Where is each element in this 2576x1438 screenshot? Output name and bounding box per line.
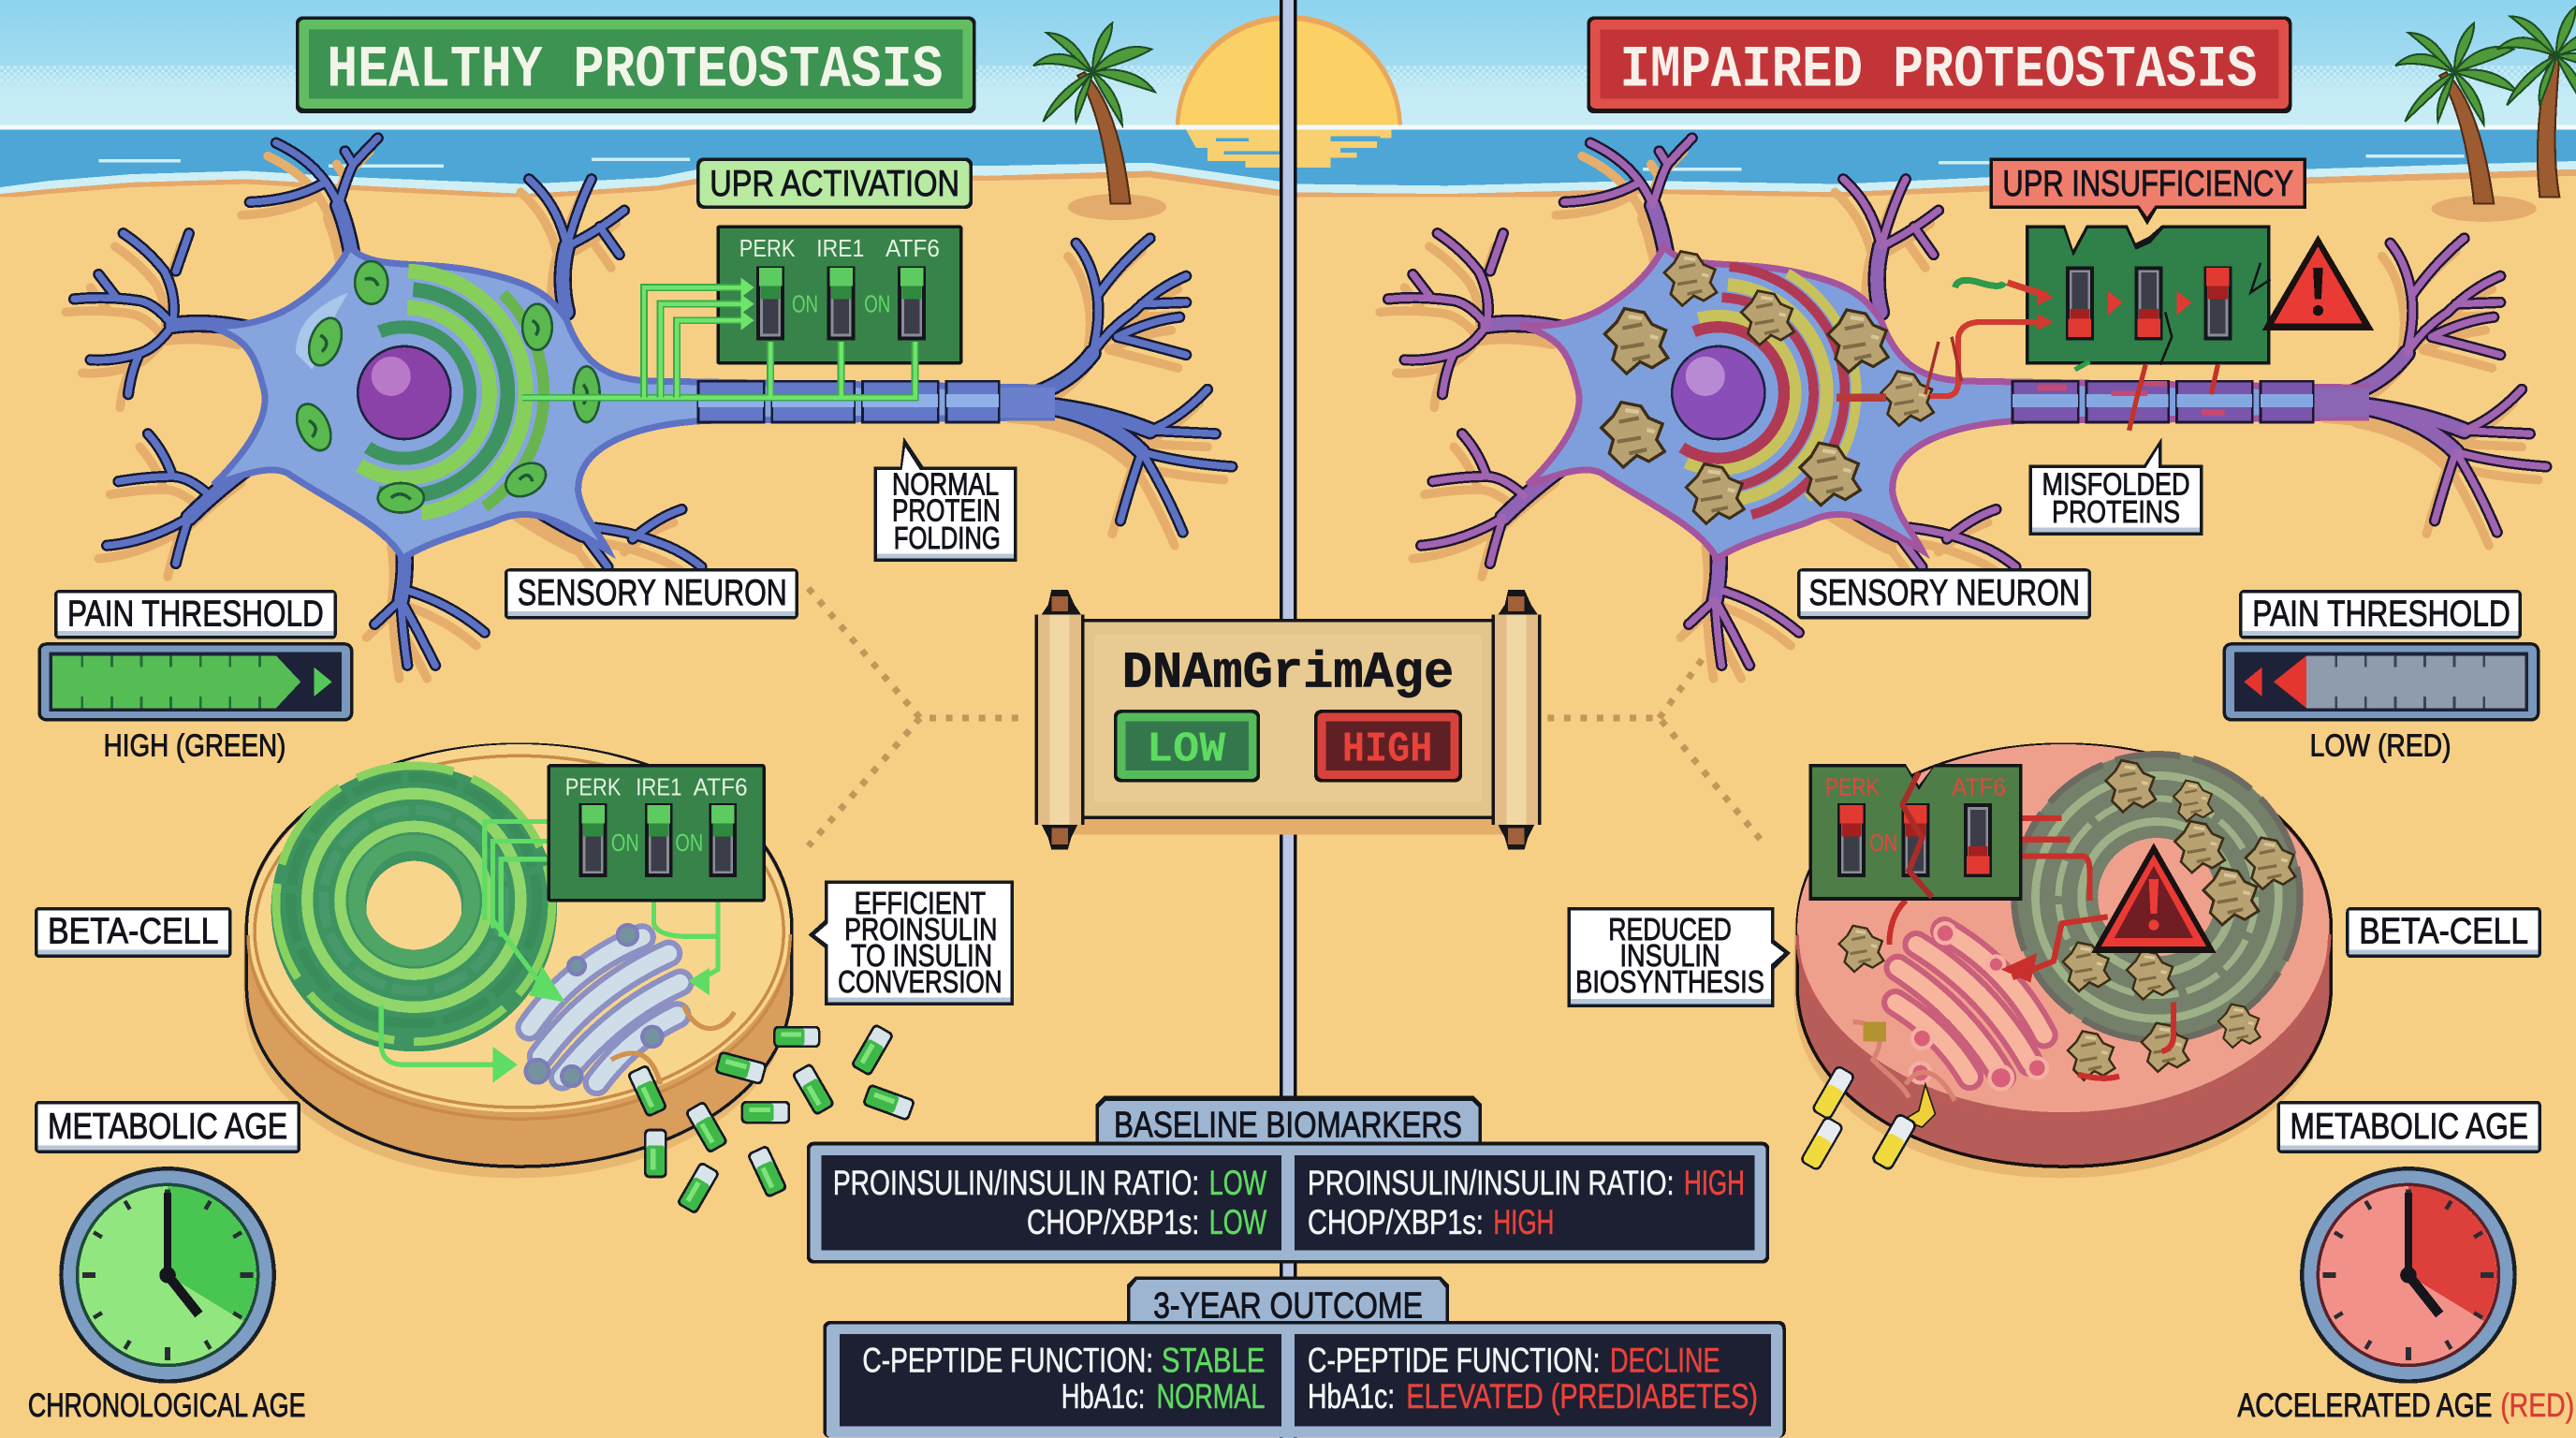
- golgi: impaired: [1877, 917, 2060, 1100]
- UPR switch panel: healthy: PERK: [739, 234, 796, 262]
- UPR switch panel: beta-cell healthy: IRE1: [636, 772, 681, 800]
- UPR switch panel: beta-cell healthy: ATF6: [694, 772, 748, 800]
- clock: chronological age: [59, 1167, 276, 1384]
- callout: efficient conversion: EFFICIENT: [855, 887, 986, 921]
- callout: normal protein folding: PROTEIN: [892, 493, 1001, 528]
- label: metabolic age: [2277, 1101, 2541, 1153]
- label: sensory neuron: [505, 568, 798, 620]
- callout: misfolded proteins: MISFOLDED: [2042, 467, 2190, 502]
- tab: 3-year outcome: [1127, 1277, 1449, 1331]
- label: beta-cell: BETA-CELL: [48, 911, 218, 951]
- misfolded ER arcs: [1530, 204, 1907, 581]
- UPR switch panel: beta-cell healthy: ON: [675, 829, 703, 857]
- callout: misfolded proteins: PROTEINS: [2052, 495, 2180, 530]
- biomarker rows: impaired: CHOP/XBP1s:: [1308, 1203, 1484, 1241]
- insulin granules: impaired: [1799, 1064, 1918, 1172]
- panel: 3-year outcome: [823, 1277, 1786, 1438]
- biomarker rows: impaired: [1308, 1164, 1745, 1241]
- outcome rows: healthy: STABLE: [1162, 1341, 1265, 1379]
- biomarker rows: healthy: [833, 1164, 1266, 1241]
- label: metabolic age: METABOLIC AGE: [2291, 1107, 2528, 1147]
- outcome rows: impaired: C-PEPTIDE FUNCTION:: [1308, 1341, 1600, 1379]
- beta-cell: impaired: [1794, 744, 2331, 1178]
- title: healthy proteostasis: [296, 17, 976, 113]
- UPR switch panel: beta-cell broken: ATF6: [1952, 772, 2006, 800]
- rough ER: beta-cell: [276, 766, 552, 1042]
- divider: center line: [1280, 0, 1297, 1438]
- panel: impaired side: [1380, 17, 2574, 1424]
- warning triangle: beta-cell: [2091, 843, 2217, 953]
- gauge: low pain threshold: [2223, 642, 2539, 721]
- caption: chronological age: CHRONOLOGICAL AGE: [28, 1387, 305, 1424]
- callout: reduced insulin biosynthesis: [1567, 907, 1791, 1007]
- gauge caption: low: LOW (RED): [2310, 728, 2452, 763]
- outcome rows: healthy: NORMAL: [1157, 1377, 1265, 1416]
- palm tree: left: [1033, 23, 1166, 220]
- panel: baseline biomarkers: [807, 1096, 1769, 1264]
- biomarker rows: impaired: HIGH: [1684, 1164, 1745, 1202]
- button: low: [1114, 710, 1260, 782]
- outcome rows: impaired: HbA1c:: [1308, 1377, 1395, 1416]
- UPR switch panel: beta-cell healthy: [547, 764, 766, 902]
- callout: normal protein folding: NORMAL: [892, 467, 999, 502]
- red arrows: beta-cell: [1889, 818, 2174, 1078]
- callout: normal protein folding: [874, 437, 1017, 562]
- damaged myelin: [2012, 381, 2313, 422]
- outcome rows: healthy: C-PEPTIDE FUNCTION:: [862, 1341, 1153, 1379]
- label: beta-cell: BETA-CELL: [2359, 911, 2528, 951]
- UPR switch panel: beta-cell broken: ON: [1869, 829, 1897, 857]
- nucleus: [1671, 345, 1766, 440]
- title: impaired proteostasis: [1587, 17, 2291, 113]
- dotted connectors: [809, 588, 1766, 846]
- label: pain threshold: PAIN THRESHOLD: [67, 594, 324, 635]
- label: sensory neuron: SENSORY NEURON: [1808, 573, 2080, 613]
- UPR switch panel: healthy: ON: [792, 289, 818, 317]
- title: healthy proteostasis: HEALTHY PROTEOSTASIS: [327, 36, 943, 103]
- UPR insufficiency label: [1989, 157, 2306, 225]
- scroll rolls: [1035, 590, 1541, 849]
- label: pain threshold: [54, 590, 337, 639]
- broken signal lines: neuron: [1837, 280, 2217, 431]
- UPR insufficiency label: UPR INSUFFICIENCY: [2002, 164, 2293, 204]
- membrane pockets: [611, 1005, 735, 1084]
- callout: reduced insulin biosynthesis: INSULIN: [1620, 939, 1720, 974]
- tab: baseline biomarkers: BASELINE BIOMARKERS: [1114, 1105, 1462, 1145]
- label: sensory neuron: [1797, 568, 2091, 620]
- biomarker rows: healthy: LOW: [1209, 1203, 1266, 1241]
- sun: [1176, 15, 1402, 242]
- biomarker rows: impaired: HIGH: [1493, 1203, 1554, 1241]
- UPR activation label: UPR ACTIVATION: [710, 164, 959, 204]
- nucleus: [357, 345, 452, 440]
- membrane pockets: [1853, 1022, 1955, 1101]
- tab: 3-year outcome: 3-YEAR OUTCOME: [1153, 1286, 1423, 1327]
- UPR switch panel: beta-cell broken: [1808, 764, 2022, 901]
- caption: accelerated age: ACCELERATED AGE: [2237, 1387, 2492, 1424]
- label: sensory neuron: SENSORY NEURON: [518, 573, 787, 613]
- callout: efficient conversion: [809, 881, 1014, 1005]
- UPR switch panel: beta-cell broken: PERK: [1825, 772, 1880, 800]
- vesicles: healthy: [526, 925, 662, 1086]
- UPR activation label: [696, 157, 973, 209]
- UPR switch panel: broken: [2026, 225, 2271, 365]
- outcome rows: impaired: ELEVATED (PREDIABETES): [1406, 1377, 1758, 1416]
- callout: efficient conversion: TO INSULIN: [851, 939, 992, 974]
- green arrows: beta-cell: [381, 812, 718, 1083]
- outcome rows: healthy: [862, 1341, 1265, 1416]
- vesicles: impaired: [1910, 923, 2047, 1090]
- label: metabolic age: METABOLIC AGE: [48, 1107, 287, 1147]
- UPR switch panel: beta-cell healthy: PERK: [565, 772, 622, 800]
- label: pain threshold: PAIN THRESHOLD: [2252, 594, 2510, 635]
- biomarker rows: healthy: CHOP/XBP1s:: [1027, 1203, 1199, 1241]
- biomarker rows: healthy: PROINSULIN/INSULIN RATIO:: [833, 1164, 1199, 1202]
- button: low: LOW: [1147, 726, 1226, 774]
- UPR switch panel: beta-cell healthy: ON: [611, 829, 639, 857]
- outcome rows: healthy: HbA1c:: [1061, 1377, 1145, 1416]
- tab: baseline biomarkers: [1096, 1096, 1482, 1151]
- beta-cell: healthy: [243, 744, 792, 1178]
- gauge: high pain threshold: [37, 642, 353, 721]
- aggregates: beta-cell: [1839, 760, 2295, 1080]
- label: metabolic age: [35, 1101, 300, 1153]
- UPR switch panel: healthy: IRE1: [816, 234, 864, 262]
- ER arcs: [207, 195, 602, 590]
- myelin segments: [698, 381, 999, 422]
- scroll heading: DNAmGrimAge: [1122, 646, 1454, 703]
- warning triangle: neuron: [2262, 235, 2374, 330]
- golgi: healthy: [516, 921, 702, 1099]
- protein aggregates: neuron: [1602, 252, 1934, 523]
- outcome rows: impaired: [1308, 1341, 1758, 1416]
- callout: normal protein folding: FOLDING: [894, 521, 1001, 556]
- button: high: HIGH: [1342, 726, 1432, 774]
- UPR switch panel: healthy: [716, 225, 963, 365]
- biomarker rows: healthy: LOW: [1209, 1164, 1266, 1202]
- callout: reduced insulin biosynthesis: REDUCED: [1608, 913, 1732, 947]
- UPR switch panel: healthy: ATF6: [886, 234, 940, 262]
- biomarker rows: impaired: PROINSULIN/INSULIN RATIO:: [1308, 1164, 1674, 1202]
- UPR signal arrows: healthy: [522, 278, 915, 398]
- mitochondria: [290, 261, 600, 513]
- sensory neuron: impaired: [1380, 138, 2546, 679]
- callout: efficient conversion: PROINSULIN: [844, 913, 997, 947]
- scroll: DNAmGrimAge: [1035, 590, 1541, 849]
- button: high: [1314, 710, 1462, 782]
- label: pain threshold: [2239, 590, 2522, 639]
- callout: reduced insulin biosynthesis: BIOSYNTHESIS: [1575, 965, 1764, 1000]
- callout: efficient conversion: CONVERSION: [838, 965, 1003, 1000]
- title: impaired proteostasis: IMPAIRED PROTEOSTASIS: [1620, 36, 2257, 103]
- clock: accelerated age: [2300, 1167, 2517, 1384]
- UPR switch panel: healthy: ON: [864, 289, 890, 317]
- palm trees: right: [2395, 7, 2576, 222]
- callout: misfolded proteins: [2029, 437, 2203, 536]
- panel: healthy side: [28, 17, 1232, 1424]
- sensory neuron: healthy: [66, 138, 1232, 679]
- rough ER: stressed: [2014, 755, 2300, 1040]
- gauge caption: high: HIGH (GREEN): [104, 728, 285, 763]
- outcome rows: impaired: DECLINE: [1610, 1341, 1720, 1379]
- insulin granules: healthy: [626, 1023, 915, 1215]
